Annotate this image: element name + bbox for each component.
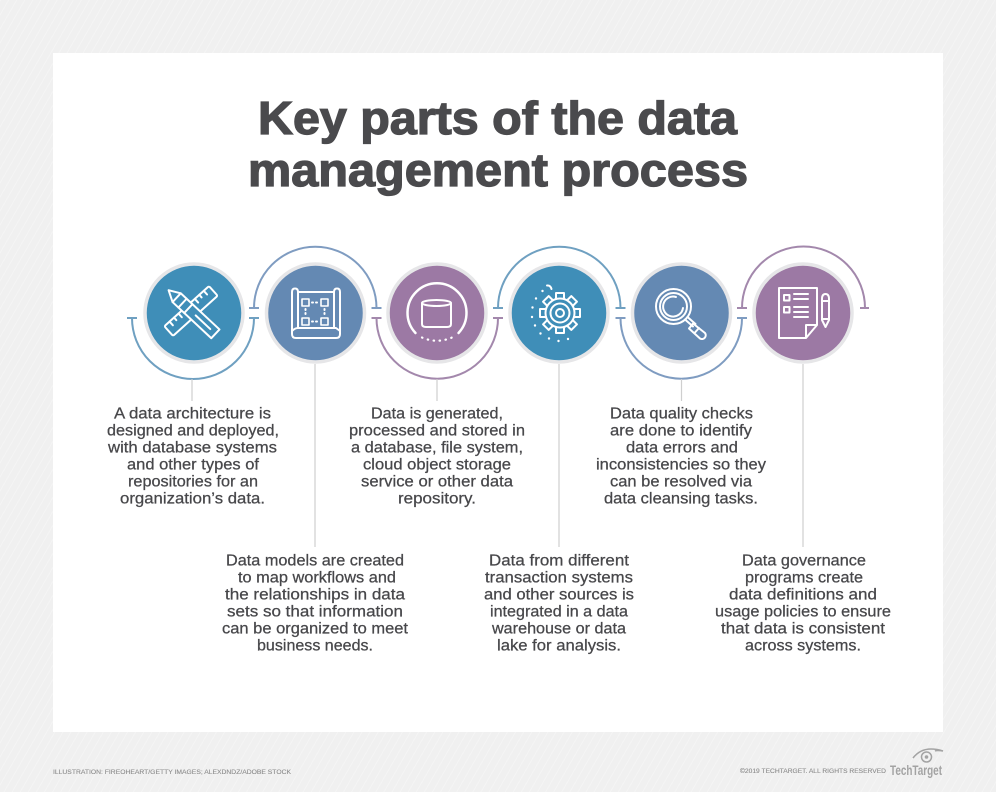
text: step 3 description: Data is generated, — [371, 406, 503, 422]
text: step 5 description: data errors and — [626, 440, 738, 456]
step 5 circle: magnifying glass icon — [632, 264, 730, 362]
text: step 1 description: and other types of — [127, 456, 260, 474]
step 6 circle: checklist and pencil icon — [754, 264, 852, 362]
step 1 circle: ruler and pencil icon — [145, 264, 243, 362]
TechTarget logo: TechTarget — [890, 762, 942, 778]
text: step 1 description: A data architecture is — [114, 406, 271, 422]
text: step 5 description: are done to identify — [610, 422, 752, 440]
text: step 2 description: business needs. — [257, 638, 373, 654]
text: step 5 description: Data quality checks — [610, 406, 753, 422]
text: step 3 description: repository. — [398, 490, 476, 508]
text: step 4 description: transaction systems — [485, 570, 633, 586]
text: step 6 description: data definitions and — [729, 586, 877, 604]
text: step 3 description: service or other data — [361, 474, 513, 490]
text: step 2 description: sets so that information — [227, 604, 403, 620]
text: step 4 description: and other sources is — [484, 586, 634, 604]
text: step 4 description: Data from different — [489, 552, 630, 570]
text: step 2 description: to map workflows and — [238, 570, 396, 586]
text: step 6 description: usage policies to ensure — [715, 604, 891, 620]
text: step 5 description: inconsistencies so they — [596, 456, 766, 474]
text: step 6 description: across systems. — [745, 638, 861, 654]
title — [248, 92, 748, 196]
step 4 circle: gear icon — [510, 264, 608, 362]
text: step 1 description: designed and deployed, — [107, 422, 279, 440]
text: step 3 description — [349, 406, 525, 508]
text: step 4 description: warehouse or data — [491, 620, 626, 638]
connecting arcs — [127, 246, 869, 379]
connector lines — [192, 364, 803, 547]
text: step 6 description: that data is consistent — [721, 620, 886, 638]
TechTarget logo — [890, 749, 943, 778]
text: step 4 description: integrated in a data — [490, 604, 628, 620]
text: step 2 description: Data models are created — [226, 552, 404, 570]
title: management process — [248, 144, 748, 196]
step 2 circle: blueprint icon — [266, 264, 364, 362]
text: step 1 description: organization’s data. — [120, 490, 265, 508]
text: step 3 description: cloud object storage — [363, 456, 511, 474]
text: step 5 description: data cleansing tasks. — [604, 490, 758, 508]
copyright: ©2019 TECHTARGET. ALL RIGHTS RESERVED — [740, 767, 886, 775]
text: step 1 description: repositories for an — [128, 474, 258, 490]
text: step 4 description: lake for analysis. — [497, 638, 621, 654]
text: step 1 description: with database systems — [107, 440, 277, 456]
white panel — [53, 53, 943, 732]
text: step 2 description — [222, 552, 409, 654]
text: step 2 description: can be organized to meet — [222, 620, 409, 638]
text: step 4 description — [484, 552, 634, 654]
text: step 2 description: the relationships in data — [225, 586, 405, 604]
text: step 6 description: Data governance — [742, 552, 866, 570]
step 3 circle: database cylinder icon — [388, 264, 486, 362]
text: step 1 description — [107, 406, 279, 508]
text: step 3 description: a database, file system, — [351, 440, 523, 456]
text: step 3 description: processed and stored in — [349, 422, 525, 440]
text: step 6 description: programs create — [745, 570, 863, 586]
illustration credit: ILLUSTRATION: FIREOHEART/GETTY IMAGES; ALEXDNDZ/ADOBE STOCK — [53, 769, 292, 776]
text: step 5 description — [596, 406, 766, 508]
text: step 5 description: can be resolved via — [610, 474, 752, 490]
title: Key parts of the data — [258, 92, 737, 144]
text: step 6 description — [715, 552, 891, 654]
